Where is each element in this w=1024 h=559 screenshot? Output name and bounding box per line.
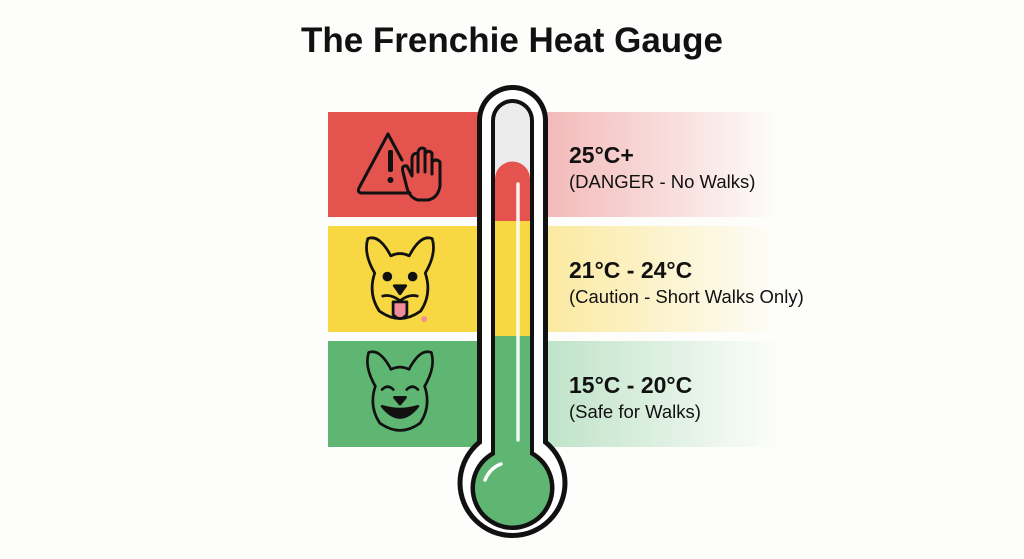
text: danger: (DANGER - No Walks) <box>569 171 755 192</box>
icon: warning triangle and hand <box>358 134 440 200</box>
text: safe: (Safe for Walks) <box>569 401 701 422</box>
text: safe: 15°C - 20°C <box>569 372 692 398</box>
text: caution: 21°C - 24°C <box>569 257 692 283</box>
panel: danger band <box>328 112 780 217</box>
text: danger: 25°C+ <box>569 142 634 168</box>
icon: panting dog <box>366 238 434 322</box>
text: caution: (Caution - Short Walks Only) <box>569 286 804 307</box>
text: safe <box>569 372 701 422</box>
title: The Frenchie Heat Gauge <box>301 21 723 60</box>
thermometer fill <box>475 162 550 526</box>
thermometer <box>458 85 568 538</box>
text: danger <box>569 142 755 192</box>
panel: caution band <box>328 226 780 332</box>
icon: happy dog <box>367 352 433 430</box>
panel: safe band <box>328 341 780 447</box>
text: caution <box>569 257 804 307</box>
